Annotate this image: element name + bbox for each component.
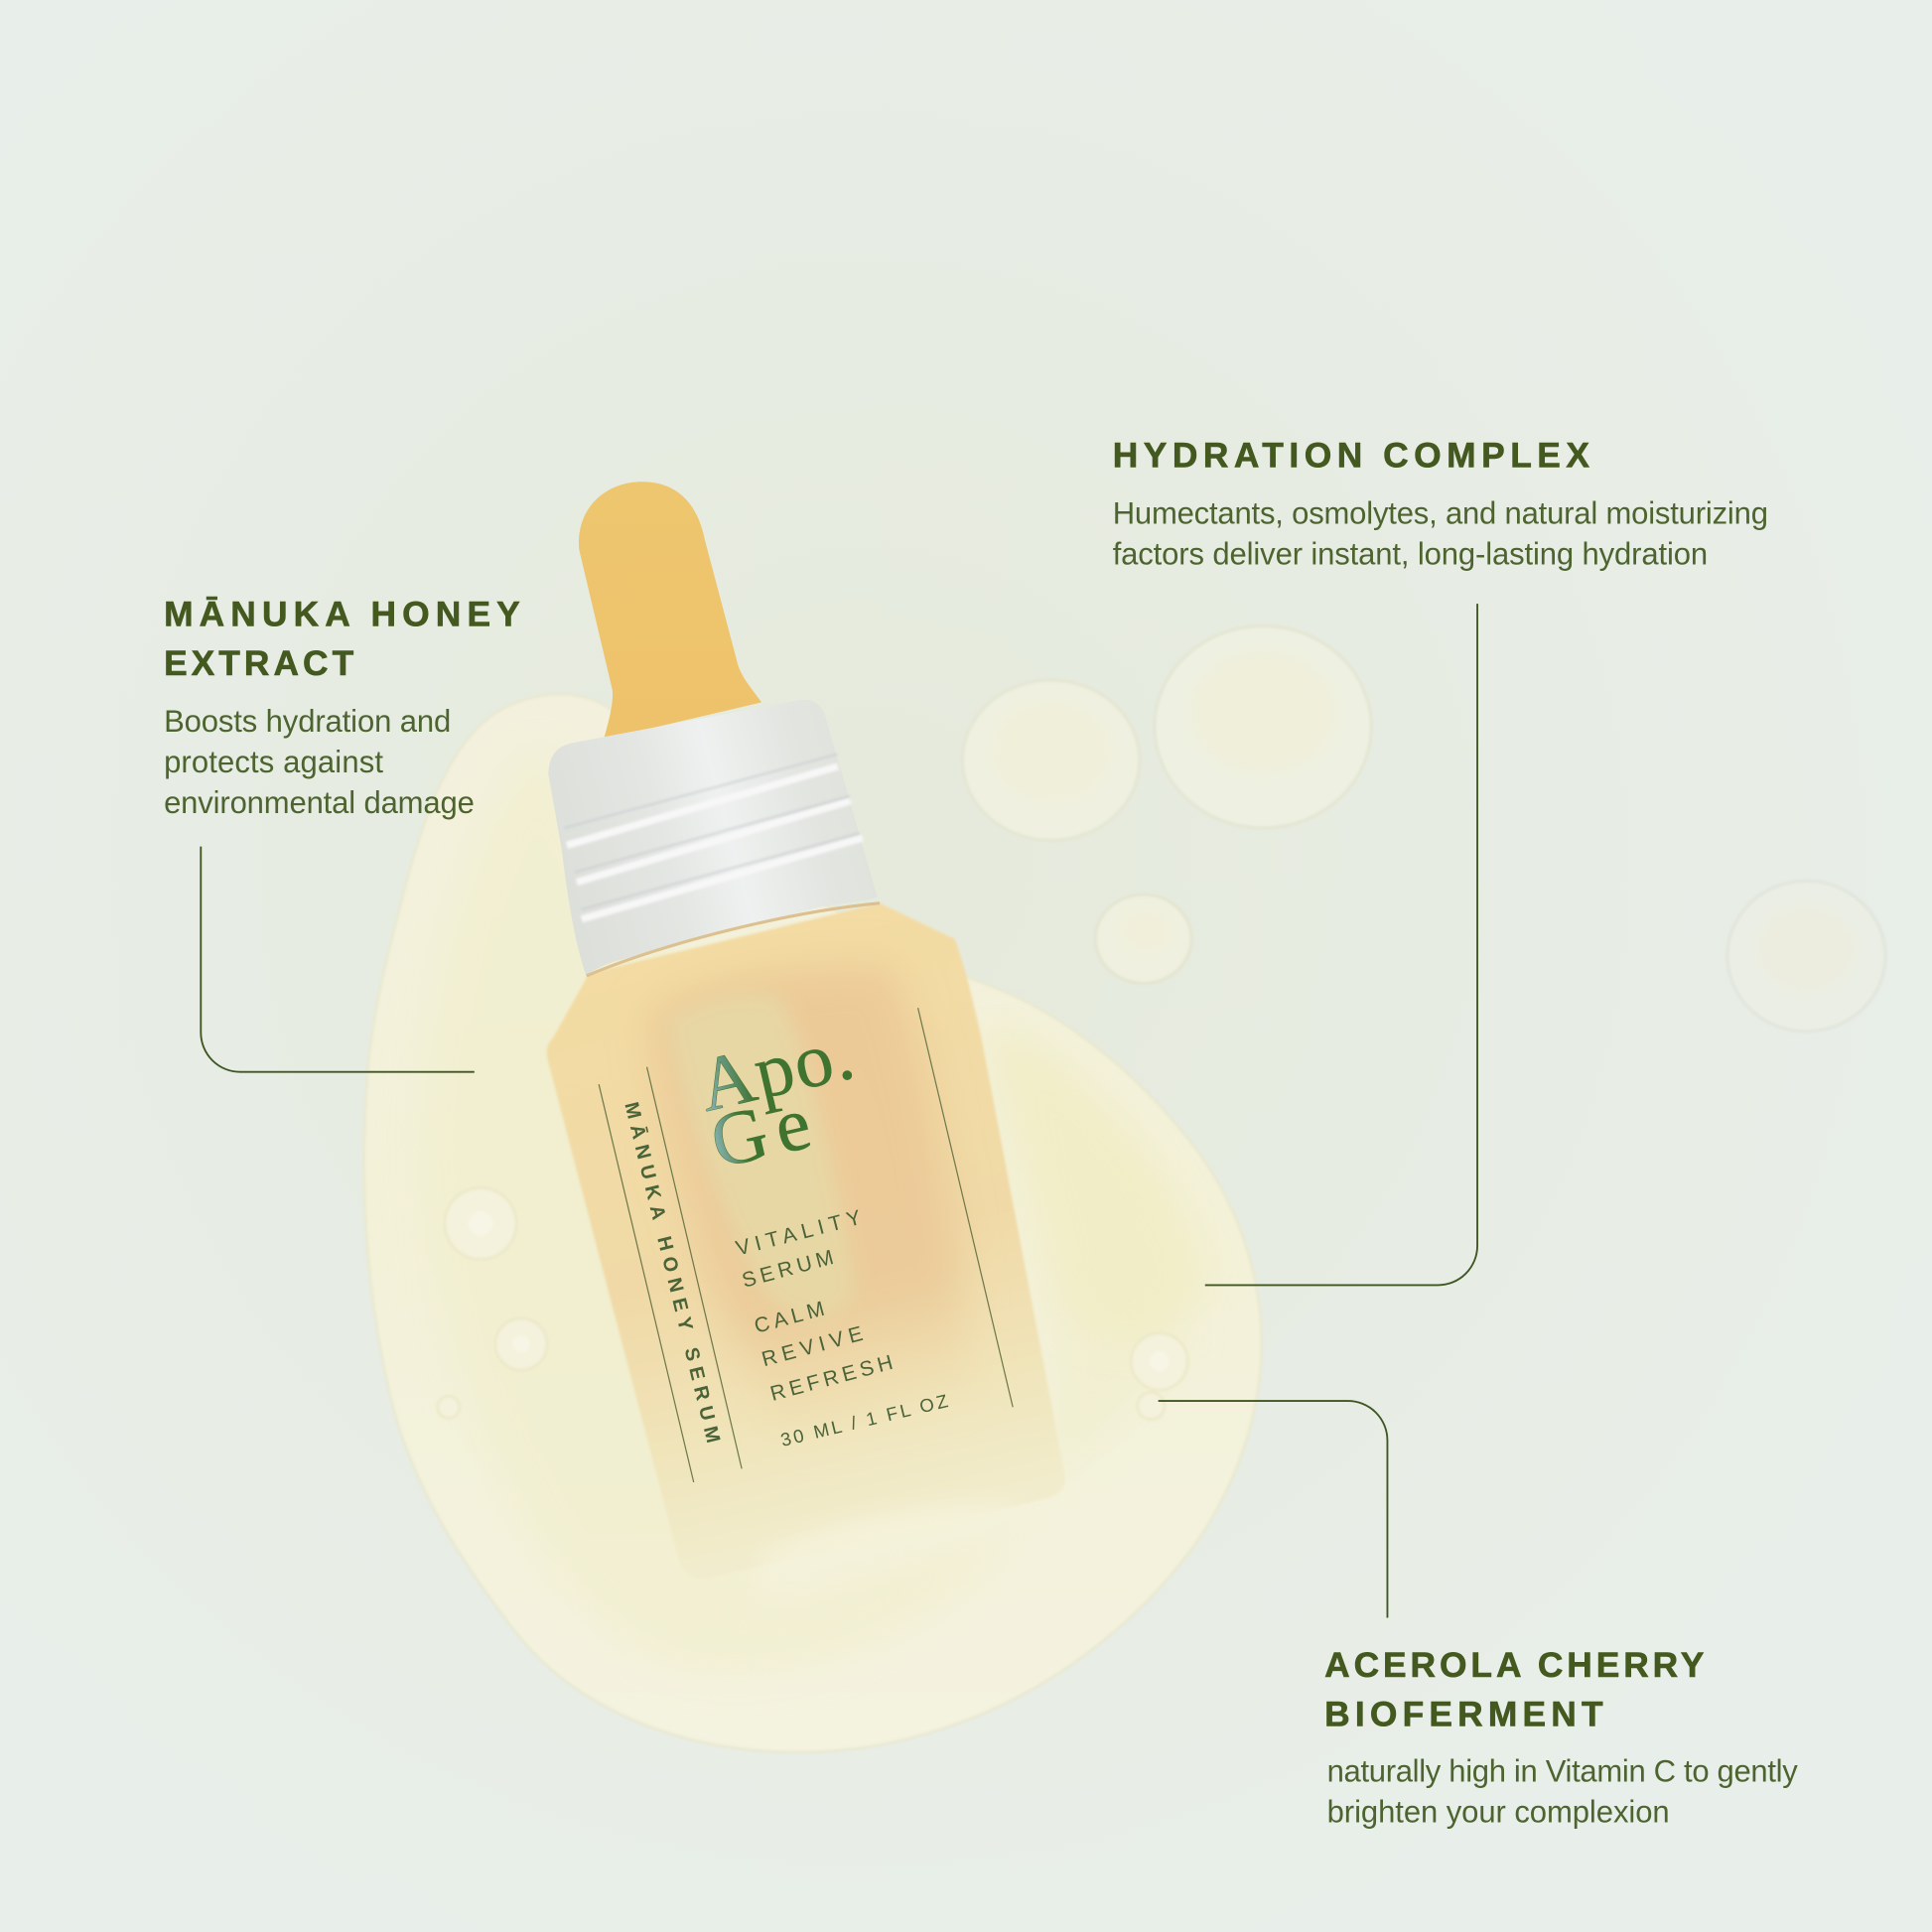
description: Boosts hydration and xyxy=(164,704,451,739)
description: Humectants, osmolytes, and natural moisturizing xyxy=(1113,495,1768,530)
droplets xyxy=(962,625,1885,1032)
callout: Acerola cherry bioferment xyxy=(1159,1401,1798,1830)
droplet 2 xyxy=(1155,625,1371,828)
callout: Hydration complex xyxy=(1113,436,1768,1285)
label rules xyxy=(599,1008,1013,1482)
droplet 4 xyxy=(1727,881,1885,1032)
logo xyxy=(691,1010,861,1184)
description: factors deliver instant, long-lasting hydration xyxy=(1113,536,1708,571)
product text: REVIVE xyxy=(759,1322,865,1371)
logo: Apo. xyxy=(691,1010,861,1128)
droplet 3 xyxy=(1095,895,1191,983)
leader line xyxy=(1159,1401,1387,1618)
droplet 1 xyxy=(962,680,1140,840)
puddle bubbles xyxy=(438,1187,1187,1420)
heading: BIOFERMENT xyxy=(1324,1696,1603,1734)
heading xyxy=(164,595,520,683)
description xyxy=(1327,1754,1798,1830)
description xyxy=(164,704,475,820)
leader line xyxy=(1205,604,1477,1285)
callout: Manuka honey extract xyxy=(164,595,520,1072)
logo: Ge xyxy=(703,1079,818,1184)
leader line xyxy=(201,847,475,1072)
description: environmental damage xyxy=(164,785,475,820)
product text: SERUM xyxy=(740,1246,836,1293)
oil puddle xyxy=(364,694,1261,1752)
description: protects against xyxy=(164,745,383,779)
description: brighten your complexion xyxy=(1327,1795,1670,1830)
silver cap xyxy=(548,700,880,976)
product text xyxy=(734,1206,950,1450)
product text: 30 ML / 1 FL OZ xyxy=(778,1390,950,1450)
heading: MĀNUKA HONEY xyxy=(164,595,520,633)
side label text: MĀNUKA HONEY SERUM xyxy=(620,1100,724,1446)
product text: REFRESH xyxy=(767,1351,896,1406)
bottle xyxy=(547,482,1065,1579)
dropper bulb xyxy=(579,482,761,740)
heading: HYDRATION COMPLEX xyxy=(1113,436,1589,475)
heading xyxy=(1324,1646,1705,1734)
product text: CALM xyxy=(752,1298,827,1338)
heading: EXTRACT xyxy=(164,644,354,683)
description: naturally high in Vitamin C to gently xyxy=(1327,1754,1798,1789)
description xyxy=(1113,495,1768,571)
glass body xyxy=(547,903,1065,1579)
heading: ACEROLA CHERRY xyxy=(1324,1646,1705,1685)
product text: VITALITY xyxy=(734,1206,864,1260)
